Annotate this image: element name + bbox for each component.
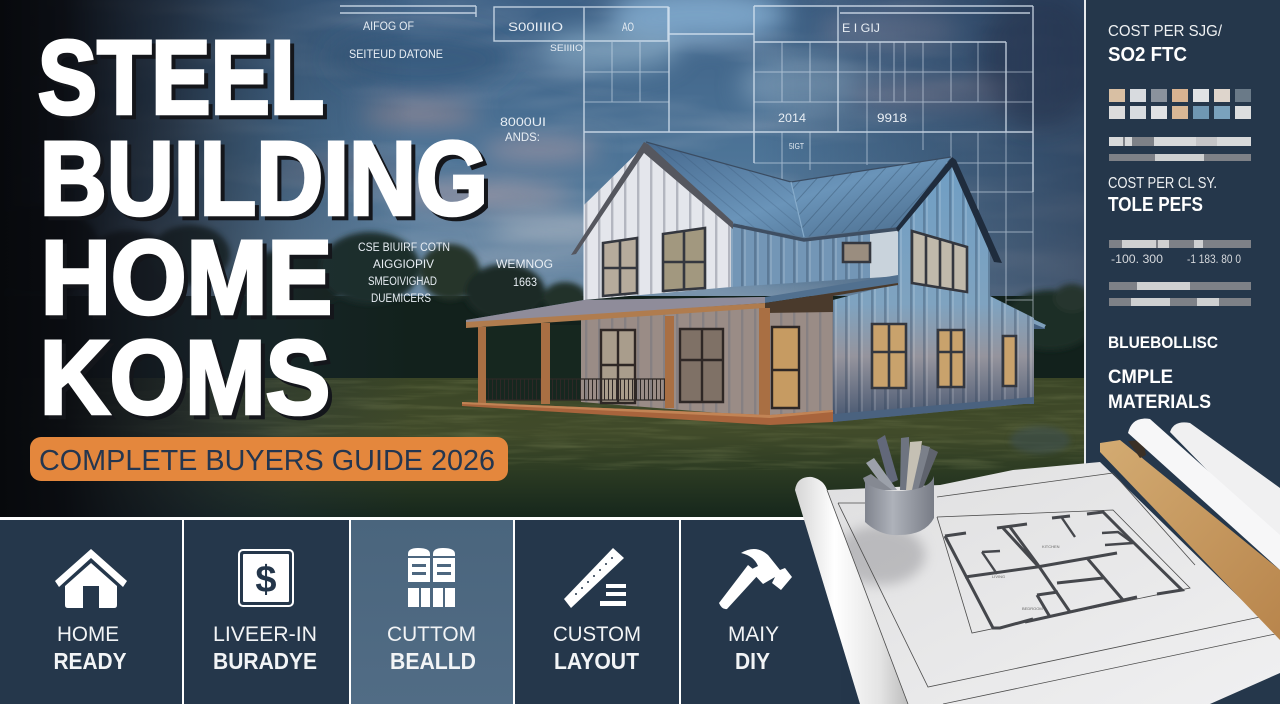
range bars two: -100. 300 [1111, 252, 1163, 266]
feature: cuttom bealld [387, 548, 476, 674]
label: cuttom bealld: CUTTOM [387, 623, 476, 646]
blueprint annotations [349, 21, 907, 305]
feature: liveer-in buradye [213, 550, 317, 674]
label: custom layout [553, 623, 641, 674]
blueprint annotations: 5IGT [789, 142, 804, 151]
label: custom layout: LAYOUT [554, 648, 639, 674]
label: home ready: READY [54, 648, 126, 674]
subtitle badge [30, 437, 508, 481]
icon: ruler and lines [564, 548, 626, 608]
blueprint annotations: E I GIJ [842, 23, 880, 35]
label: cuttom bealld: BEALLD [390, 648, 476, 674]
blueprint annotations: AIGGIOPIV [373, 259, 434, 271]
heading: cost per sqg: COST PER SJG/ [1108, 23, 1223, 40]
blueprint annotations: WEMNOG [496, 259, 553, 271]
blueprint annotations: DUEMICERS [371, 293, 431, 305]
panel: right sidebar [1084, 0, 1280, 704]
icon: plan sheets [408, 548, 455, 607]
porch back wall [486, 300, 833, 417]
label: cmple materials [1108, 367, 1211, 413]
label: cuttom bealld [387, 623, 476, 674]
colour swatches [1109, 89, 1251, 119]
label: home ready [54, 623, 126, 674]
left gable trim [571, 142, 733, 255]
blueprint annotations: ANDS: [505, 132, 540, 144]
icon: dollar sign: $ [255, 559, 277, 601]
rear paper roll [1170, 422, 1280, 545]
porch roof [466, 275, 898, 328]
blueprint annotations: 2014 [778, 113, 807, 125]
house illustration [462, 142, 1046, 425]
foundation [833, 397, 1034, 422]
range bars two [1109, 240, 1251, 306]
range bars one [1109, 137, 1251, 161]
floor plan labels: LIVING [992, 574, 1005, 579]
heading: cost per cl sy: TOLE PEFS [1108, 194, 1203, 216]
pen cup shadow [835, 525, 925, 585]
label: maiy diy [728, 623, 779, 674]
floor plan labels: BEDROOM [1022, 606, 1043, 611]
floor plan [945, 512, 1182, 628]
feature: maiy diy [719, 549, 792, 674]
label: liveer-in buradye [213, 623, 317, 674]
porch railing [478, 379, 665, 400]
label: cmple materials: MATERIALS [1108, 392, 1211, 413]
porch deck [462, 402, 833, 425]
wooden ruler [1100, 440, 1280, 640]
blueprint annotations: S00IIIIO [508, 22, 563, 34]
blueprint annotations: 8000UI [500, 117, 546, 129]
blueprint annotations: 9918 [877, 113, 907, 125]
cup body [865, 476, 934, 535]
label: liveer-in buradye: BURADYE [213, 648, 317, 674]
label: home ready: HOME [57, 623, 119, 646]
treeline [0, 205, 1095, 380]
right gable trim [896, 157, 1002, 263]
blueprint annotations: SEIIIIO [550, 43, 583, 53]
left paper roll [795, 477, 908, 704]
white gable wall [584, 146, 731, 300]
porch posts [478, 308, 770, 416]
blueprint annotations: SEITEUD DATONE [349, 49, 443, 61]
panel: feature strip [0, 517, 841, 704]
heading: cost per cl sy: COST PER CL SY. [1108, 175, 1217, 192]
panel: photo background [0, 0, 1100, 517]
blueprint annotations: AIFOG OF [363, 21, 414, 33]
heading: cost per sqg: SO2 FTC [1108, 44, 1187, 66]
floor plan labels: KITCHEN [1042, 544, 1060, 549]
label: maiy diy: DIY [735, 648, 770, 674]
front paper roll [1128, 419, 1280, 570]
feature: custom layout [553, 548, 641, 674]
label: cmple materials: CMPLE [1108, 367, 1173, 388]
roof fascia [733, 225, 898, 240]
blueprint annotations: AO [622, 22, 634, 34]
blueprint grid overlay [340, 6, 1033, 380]
feature: home ready [54, 549, 127, 674]
subtitle badge: COMPLETE BUYERS GUIDE 2026 [39, 445, 495, 477]
icon: house [55, 549, 127, 608]
title: HOME [41, 219, 332, 336]
title [38, 19, 488, 436]
title: KOMS [40, 319, 330, 436]
blue side wall [833, 160, 1034, 422]
blueprint sheet [795, 419, 1280, 704]
lean-to side roof [983, 297, 1046, 404]
sheet [827, 462, 1280, 704]
title: STEEL [38, 19, 324, 136]
range bars two: -1 183. 80 0 [1187, 252, 1241, 266]
sheet border lines [827, 473, 1280, 704]
middle wall [731, 222, 898, 287]
blueprint annotations: SMEOIVIGHAD [368, 276, 437, 288]
heading: cost per cl sy [1108, 175, 1217, 216]
heading: cost per sqg [1108, 23, 1223, 66]
label: custom layout: CUSTOM [553, 623, 641, 646]
label: liveer-in buradye: LIVEER-IN [213, 623, 317, 646]
icon: hammer [719, 549, 792, 609]
floor plan labels [992, 544, 1060, 611]
blueprint annotations: 1663 [513, 277, 537, 289]
main roof [646, 142, 951, 237]
label: maiy diy: MAIY [728, 623, 779, 646]
porch windows and doors [601, 327, 799, 408]
pen cup [863, 435, 938, 535]
pens [863, 435, 938, 490]
blueprint annotations: CSE BIUIRF COTN [358, 242, 450, 254]
title: BUILDING [40, 120, 488, 237]
label: bluebollisc: BLUEBOLLISC [1108, 333, 1218, 352]
upper and side windows [603, 228, 1016, 388]
